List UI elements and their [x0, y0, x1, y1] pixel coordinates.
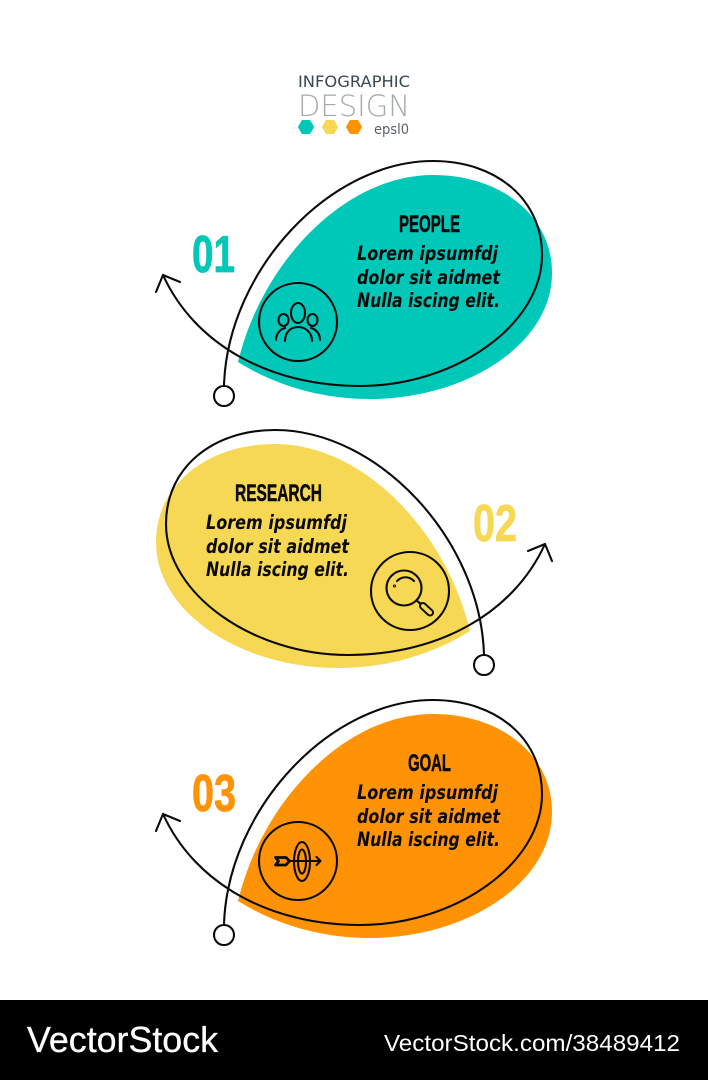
- footer brand: VectorStock: [27, 1019, 219, 1060]
- eps label: epsl0: [374, 122, 409, 138]
- start circle: [214, 925, 234, 945]
- body text: dolor sit aidmet: [357, 805, 501, 828]
- hexagon yellow: [323, 121, 337, 133]
- body text: [206, 511, 350, 581]
- orange blob: [238, 714, 552, 938]
- heading: PEOPLE: [399, 211, 460, 238]
- icon: target: [259, 822, 337, 900]
- heading: GOAL: [408, 750, 451, 777]
- yellow blob: [156, 444, 470, 668]
- hexagon orange: [347, 121, 361, 133]
- number 03: 03: [192, 765, 236, 823]
- panel: goal: [156, 700, 552, 945]
- teal blob: [238, 175, 552, 399]
- body text: Nulla iscing elit.: [357, 828, 500, 851]
- footer url: VectorStock.com/38489412: [384, 1030, 680, 1056]
- heading: RESEARCH: [235, 480, 322, 507]
- body text: Lorem ipsumfdj: [206, 511, 347, 534]
- start circle: [474, 655, 494, 675]
- number 02: 02: [473, 495, 517, 553]
- body text: Lorem ipsumfdj: [357, 781, 498, 804]
- start circle: [214, 386, 234, 406]
- panel: research: [156, 430, 552, 675]
- outline arrow: [156, 161, 542, 386]
- body text: Nulla iscing elit.: [206, 558, 349, 581]
- body text: dolor sit aidmet: [206, 535, 350, 558]
- hexagon teal: [299, 121, 313, 133]
- body text: dolor sit aidmet: [357, 266, 501, 289]
- outline arrow: [166, 430, 552, 655]
- title: infographic: INFOGRAPHIC: [298, 72, 410, 91]
- title: design: DESIGN: [298, 89, 410, 123]
- body text: Lorem ipsumfdj: [357, 242, 498, 265]
- icon: people: [259, 283, 337, 361]
- footer bar: [0, 1000, 708, 1080]
- panel: people: [156, 161, 552, 406]
- number 01: 01: [192, 226, 235, 284]
- outline arrow: [156, 700, 542, 925]
- body text: [357, 781, 501, 851]
- body text: [357, 242, 501, 312]
- body text: Nulla iscing elit.: [357, 289, 500, 312]
- header logo: [298, 72, 410, 138]
- icon: magnifier: [371, 552, 449, 630]
